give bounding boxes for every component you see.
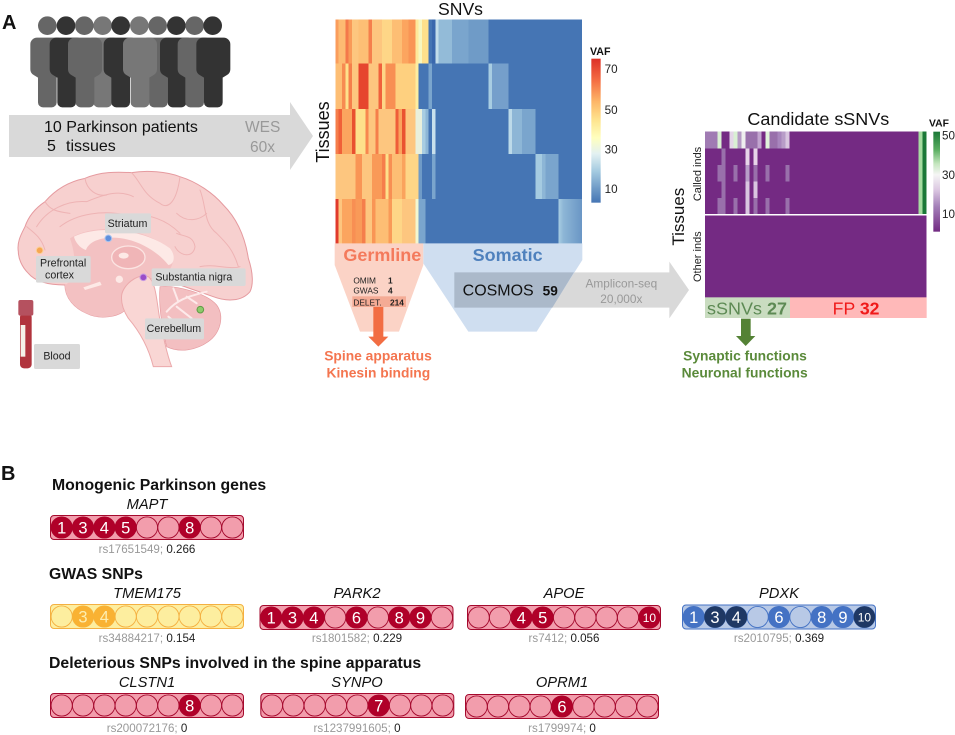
row 2	[335, 63, 509, 109]
heading: GWAS SNPs: GWAS SNPs	[49, 566, 143, 583]
tissue label: cerebellum	[145, 318, 204, 339]
gene: SYNPO: SYNPO	[331, 675, 383, 691]
gene: PDXK: rs2010795; 0.369	[734, 632, 824, 645]
gene: PDXK: 9	[838, 609, 848, 627]
row 1	[335, 19, 489, 63]
tissue label: substantia nigra	[152, 268, 246, 286]
axis label: Tissues: Tissues	[313, 101, 333, 163]
funnel: germline	[335, 243, 423, 332]
funnel: germline: 1	[388, 275, 393, 285]
gene: MAPT: 8	[185, 520, 194, 538]
cerebellum arbor	[167, 288, 207, 327]
VAF colour bar: SNVs: 50	[605, 104, 618, 117]
gene: CLSTN1: rs200072176; 0	[107, 722, 187, 735]
arrow: patients and WES: WES	[245, 119, 280, 136]
arrow: patients and WES	[9, 102, 313, 170]
gene: PDXK: 10	[858, 610, 871, 624]
heading: candidate sSNVs: Candidate sSNVs	[747, 109, 889, 129]
VAF colour bar: SNVs: 30	[605, 143, 618, 156]
germline functions: Spine apparatus	[324, 348, 432, 364]
sSNV functions: Synaptic functions	[683, 348, 807, 364]
VAF colour bar: SNVs: 70	[605, 63, 618, 76]
gyri folds	[27, 173, 240, 268]
row 4	[335, 154, 559, 199]
heading: monogenic genes: Monogenic Parkinson genes	[52, 477, 266, 494]
gene: PARK2	[260, 586, 453, 645]
gene: APOE: rs7412; 0.056	[529, 632, 599, 645]
gene: APOE: 4	[517, 610, 526, 628]
tissue label: cerebellum: Cerebellum	[147, 323, 201, 335]
funnel: germline: OMIM	[353, 275, 376, 285]
candidate heatmap	[705, 132, 927, 297]
tissue label: prefrontal cortex: cortex	[45, 269, 75, 281]
gene: TMEM175: rs34884217; 0.154	[99, 632, 196, 645]
axis label: Tissues: Tissues	[669, 188, 688, 246]
gene: PDXK: 1	[689, 609, 698, 627]
gene: SYNPO: 7	[374, 698, 383, 716]
arrow: sSNV result	[736, 319, 755, 346]
gene: TMEM175: 4	[100, 608, 109, 626]
cerebrum outline	[18, 171, 252, 317]
gene: MAPT: 5	[121, 520, 130, 538]
panel label A: A	[2, 12, 16, 34]
arrow: patients and WES: tissues	[66, 138, 116, 155]
tissue label: striatum	[105, 213, 151, 233]
VAF colour bar: candidates: 50	[942, 129, 955, 142]
funnel: germline: 4	[388, 286, 393, 296]
germline functions	[324, 348, 432, 380]
gene: APOE: 10	[643, 611, 656, 625]
tissue label: substantia nigra: Substantia nigra	[155, 272, 232, 284]
VAF colour bar: candidates: 30	[942, 169, 955, 182]
gene: CLSTN1: CLSTN1	[119, 675, 175, 691]
gene: PARK2: 3	[288, 610, 297, 628]
germline functions: Kinesin binding	[326, 364, 430, 380]
brain illustration with tissue labels	[18, 171, 252, 369]
gene: TMEM175: TMEM175	[113, 586, 182, 602]
arrow: patients and WES: 5	[47, 138, 56, 155]
gene: OPRM1: rs1799974; 0	[528, 722, 596, 735]
gene: SYNPO	[261, 675, 454, 735]
funnel: germline: GWAS	[353, 286, 379, 296]
gene: PARK2: PARK2	[333, 586, 381, 602]
blood tube	[18, 300, 33, 368]
gene: PDXK: 4	[732, 609, 741, 627]
gene: PARK2: 4	[309, 610, 318, 628]
gene: PARK2: 6	[352, 610, 361, 628]
gene: TMEM175	[50, 586, 244, 645]
VAF colour bar: SNVs	[590, 46, 618, 203]
arrow: patients and WES: 10 Parkinson patients	[44, 119, 198, 136]
candidate sSNV panel	[669, 109, 955, 380]
arrow: amplicon sequencing: 20,000x	[600, 292, 642, 306]
tissue label: blood	[34, 344, 80, 369]
row 3	[335, 109, 535, 154]
brainstem	[121, 276, 172, 367]
axis label: Other inds: Other inds	[692, 231, 704, 282]
tissue label: striatum: Striatum	[108, 218, 147, 230]
germline and somatic funnels	[324, 243, 689, 380]
funnel: somatic	[423, 243, 582, 332]
gene: CLSTN1: 8	[185, 698, 194, 716]
funnel: somatic: COSMOS	[463, 283, 534, 300]
arrow: germline result	[368, 307, 388, 347]
marker dots	[36, 235, 204, 313]
gene: APOE: APOE	[543, 586, 585, 602]
gene: PARK2: 1	[267, 610, 276, 628]
gene: OPRM1: 6	[557, 698, 567, 716]
corpus callosum	[74, 230, 174, 265]
VAF colour bar: candidates: VAF	[929, 118, 949, 129]
gene: PDXK	[682, 586, 876, 645]
gene: APOE: 5	[538, 610, 547, 628]
gene: OPRM1: OPRM1	[536, 675, 588, 691]
deep brain region	[65, 229, 173, 317]
tissue label: blood: Blood	[43, 351, 71, 363]
gene: MAPT: 1	[57, 520, 66, 538]
arrow: patients and WES: 60x	[250, 139, 275, 156]
VAF colour bar: SNVs: 10	[605, 183, 618, 196]
gene: MAPT	[50, 497, 244, 556]
funnel: germline: DELET.	[353, 297, 382, 307]
funnel: germline: 214	[390, 297, 404, 307]
strip: sSNVs 27: sSNVs 27	[707, 298, 787, 318]
strip: FP 32: FP 32	[833, 298, 880, 318]
arrow: amplicon sequencing	[454, 262, 689, 318]
gene: MAPT: 4	[100, 520, 109, 538]
gene: PDXK: PDXK	[759, 586, 800, 602]
thalamus	[112, 246, 145, 269]
gene: TMEM175: 3	[78, 608, 88, 626]
gene: APOE	[468, 586, 660, 645]
gene: SYNPO: rs1237991605; 0	[313, 722, 401, 735]
patients group icon	[30, 16, 230, 107]
SNV heatmap	[335, 19, 582, 244]
row 5	[335, 199, 582, 244]
gene: PDXK: 6	[774, 609, 784, 627]
funnel: somatic: Somatic	[473, 245, 543, 265]
gene: PARK2: 8	[395, 610, 404, 628]
sSNV functions: Neuronal functions	[682, 364, 808, 380]
cerebellum	[160, 286, 221, 350]
VAF colour bar: candidates: 10	[942, 208, 955, 221]
gene: PARK2: rs1801582; 0.229	[312, 632, 402, 645]
gene: PDXK: 8	[817, 609, 826, 627]
funnel: somatic: 59	[543, 284, 558, 299]
funnel: germline: Germline	[343, 245, 421, 265]
gene: PARK2: 9	[416, 610, 425, 628]
strip: FP 32	[790, 297, 927, 318]
gene: MAPT: 3	[78, 520, 88, 538]
VAF colour bar: candidates	[929, 118, 955, 232]
gene: MAPT: MAPT	[127, 497, 168, 513]
axis label: Called inds: Called inds	[692, 146, 704, 201]
panel label B: B	[1, 463, 15, 485]
tissue label: prefrontal cortex	[36, 256, 91, 283]
gene: CLSTN1	[50, 675, 244, 735]
arrow: amplicon sequencing: Amplicon-seq	[586, 277, 657, 291]
tissue label: prefrontal cortex: Prefrontal	[40, 257, 86, 269]
gene: MAPT: rs17651549; 0.266	[99, 543, 195, 556]
gene: OPRM1	[466, 675, 658, 735]
sSNV functions	[682, 348, 808, 380]
heading: deleterious SNPs: Deleterious SNPs involved in the spine apparatus	[49, 655, 421, 672]
gene: PDXK: 3	[710, 609, 720, 627]
VAF colour bar: SNVs: VAF	[590, 46, 611, 58]
